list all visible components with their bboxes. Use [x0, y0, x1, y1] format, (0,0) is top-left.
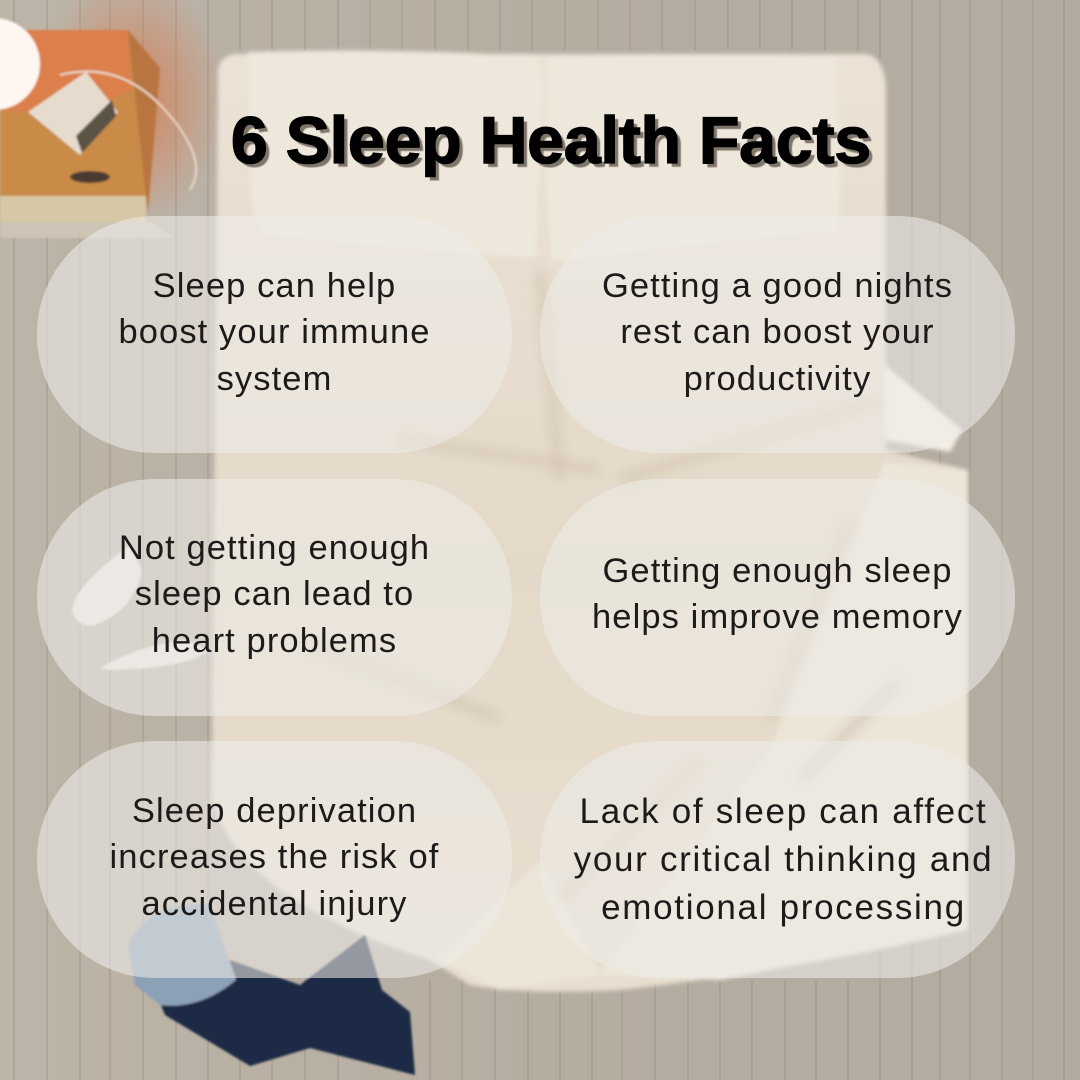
bed: [212, 51, 968, 992]
panel: memory fact: [540, 479, 1015, 716]
text: accidental injury: [110, 792, 439, 923]
text: memory: helps improve memory: [592, 598, 963, 636]
text: productivity: productivity: [684, 360, 871, 398]
text: critical thinking: [574, 792, 993, 927]
shoes: [72, 545, 208, 670]
text: accidental injury: Sleep deprivation: [132, 792, 417, 830]
text: productivity: Getting a good nights: [602, 267, 953, 305]
text: critical thinking: your critical thinking and: [574, 840, 993, 879]
text: heart problems: Not getting enough: [119, 529, 430, 567]
text: critical thinking: emotional processing: [601, 888, 966, 927]
text: accidental injury: accidental injury: [141, 885, 408, 923]
panel: critical thinking fact: [540, 741, 1015, 978]
panel: heart problems fact: [37, 479, 512, 716]
text: critical thinking: Lack of sleep can affect: [580, 792, 987, 831]
text: immune system: Sleep can help: [153, 267, 396, 305]
text: immune system: boost your immune: [118, 313, 431, 351]
text: immune system: [118, 267, 431, 398]
text: heart problems: heart problems: [152, 622, 397, 660]
title: 6 Sleep Health Facts: [231, 103, 871, 177]
text: productivity: rest can boost your: [620, 313, 935, 351]
panel: productivity fact: [540, 216, 1015, 453]
text: heart problems: sleep can lead to: [135, 575, 414, 613]
text: productivity: [602, 267, 953, 398]
text: accidental injury: increases the risk of: [110, 838, 439, 876]
panel: immune system fact: [37, 216, 512, 453]
jeans: [128, 904, 415, 1075]
nightstand: [0, 18, 196, 238]
text: immune system: system: [217, 360, 332, 398]
text: heart problems: [119, 529, 430, 660]
text: memory: [592, 552, 963, 636]
panel: accidental injury fact: [37, 741, 512, 978]
text: memory: Getting enough sleep: [602, 552, 952, 590]
